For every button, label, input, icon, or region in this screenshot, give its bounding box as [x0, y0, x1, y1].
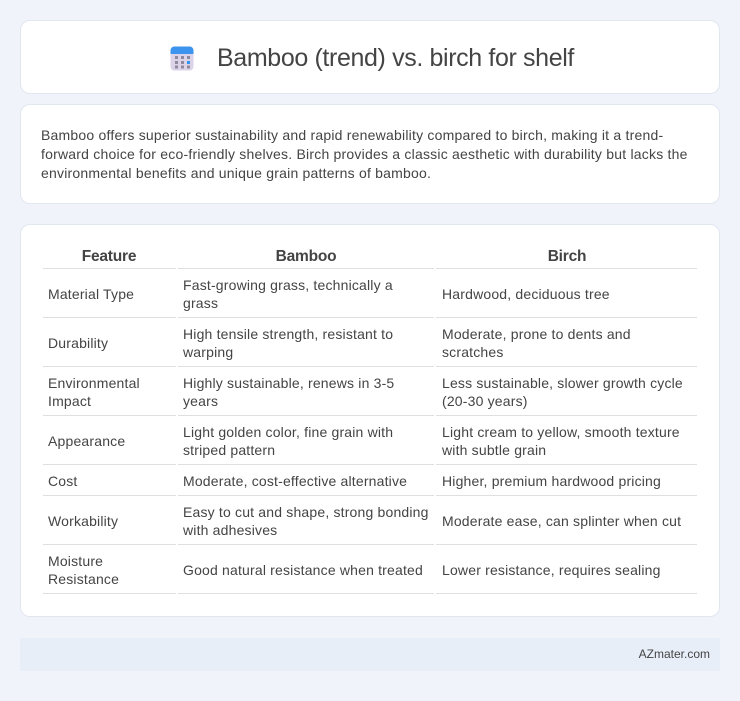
text: (20-30 years): [442, 393, 528, 409]
text: Highly sustainable, renews in 3-5: [183, 375, 394, 391]
text: with subtle grain: [442, 442, 546, 458]
text: Fast-growing grass, technically a: [183, 277, 393, 293]
title: Bamboo (trend) vs. birch for shelf: [217, 44, 574, 72]
text: scratches: [442, 344, 504, 360]
text: Cost: [48, 473, 78, 489]
text: Hardwood, deciduous tree: [442, 286, 610, 302]
text: Moderate, cost-effective alternative: [183, 473, 407, 489]
text: Light cream to yellow, smooth texture: [442, 424, 680, 440]
text: Impact: [48, 393, 91, 409]
footer credit: AZmater.com: [639, 647, 710, 661]
summary text: Bamboo offers superior sustainability and rapid renewability compared to birch, making it a trend-: [41, 127, 663, 143]
text: warping: [183, 344, 233, 360]
text: Environmental: [48, 375, 140, 391]
icon: calendar: [170, 46, 194, 70]
text: with adhesives: [183, 522, 277, 538]
summary panel: [20, 104, 720, 204]
text: Material Type: [48, 286, 134, 302]
text: Bamboo: [276, 248, 336, 265]
text: Light golden color, fine grain with: [183, 424, 393, 440]
row: durability: [48, 326, 631, 360]
summary text: environmental benefits and unique grain patterns of bamboo.: [41, 165, 431, 181]
summary text: [41, 127, 688, 181]
row: moisture resistance: [48, 553, 661, 587]
comparison table panel: [20, 224, 720, 617]
text: Durability: [48, 335, 108, 351]
summary text: forward choice for eco-friendly shelves. Birch provides a classic aesthetic with durability but lacks the: [41, 146, 688, 162]
text: Appearance: [48, 433, 125, 449]
column headers: [82, 248, 586, 265]
row: material type: [48, 277, 610, 311]
text: Resistance: [48, 571, 119, 587]
table: [43, 248, 697, 594]
text: Birch: [548, 248, 586, 265]
text: Feature: [82, 248, 136, 265]
row: appearance: [48, 424, 680, 458]
text: Higher, premium hardwood pricing: [442, 473, 661, 489]
text: years: [183, 393, 218, 409]
text: Easy to cut and shape, strong bonding: [183, 504, 429, 520]
row: environmental impact: [48, 375, 683, 409]
row: cost: [48, 473, 661, 489]
text: Workability: [48, 513, 118, 529]
footer bar: [20, 638, 720, 671]
text: Moderate ease, can splinter when cut: [442, 513, 681, 529]
text: High tensile strength, resistant to: [183, 326, 393, 342]
header panel: [20, 20, 720, 94]
text: Less sustainable, slower growth cycle: [442, 375, 683, 391]
text: Moderate, prone to dents and: [442, 326, 631, 342]
text: Good natural resistance when treated: [183, 562, 423, 578]
text: grass: [183, 295, 218, 311]
text: Moisture: [48, 553, 103, 569]
text: Lower resistance, requires sealing: [442, 562, 661, 578]
text: striped pattern: [183, 442, 275, 458]
row: workability: [48, 504, 681, 538]
